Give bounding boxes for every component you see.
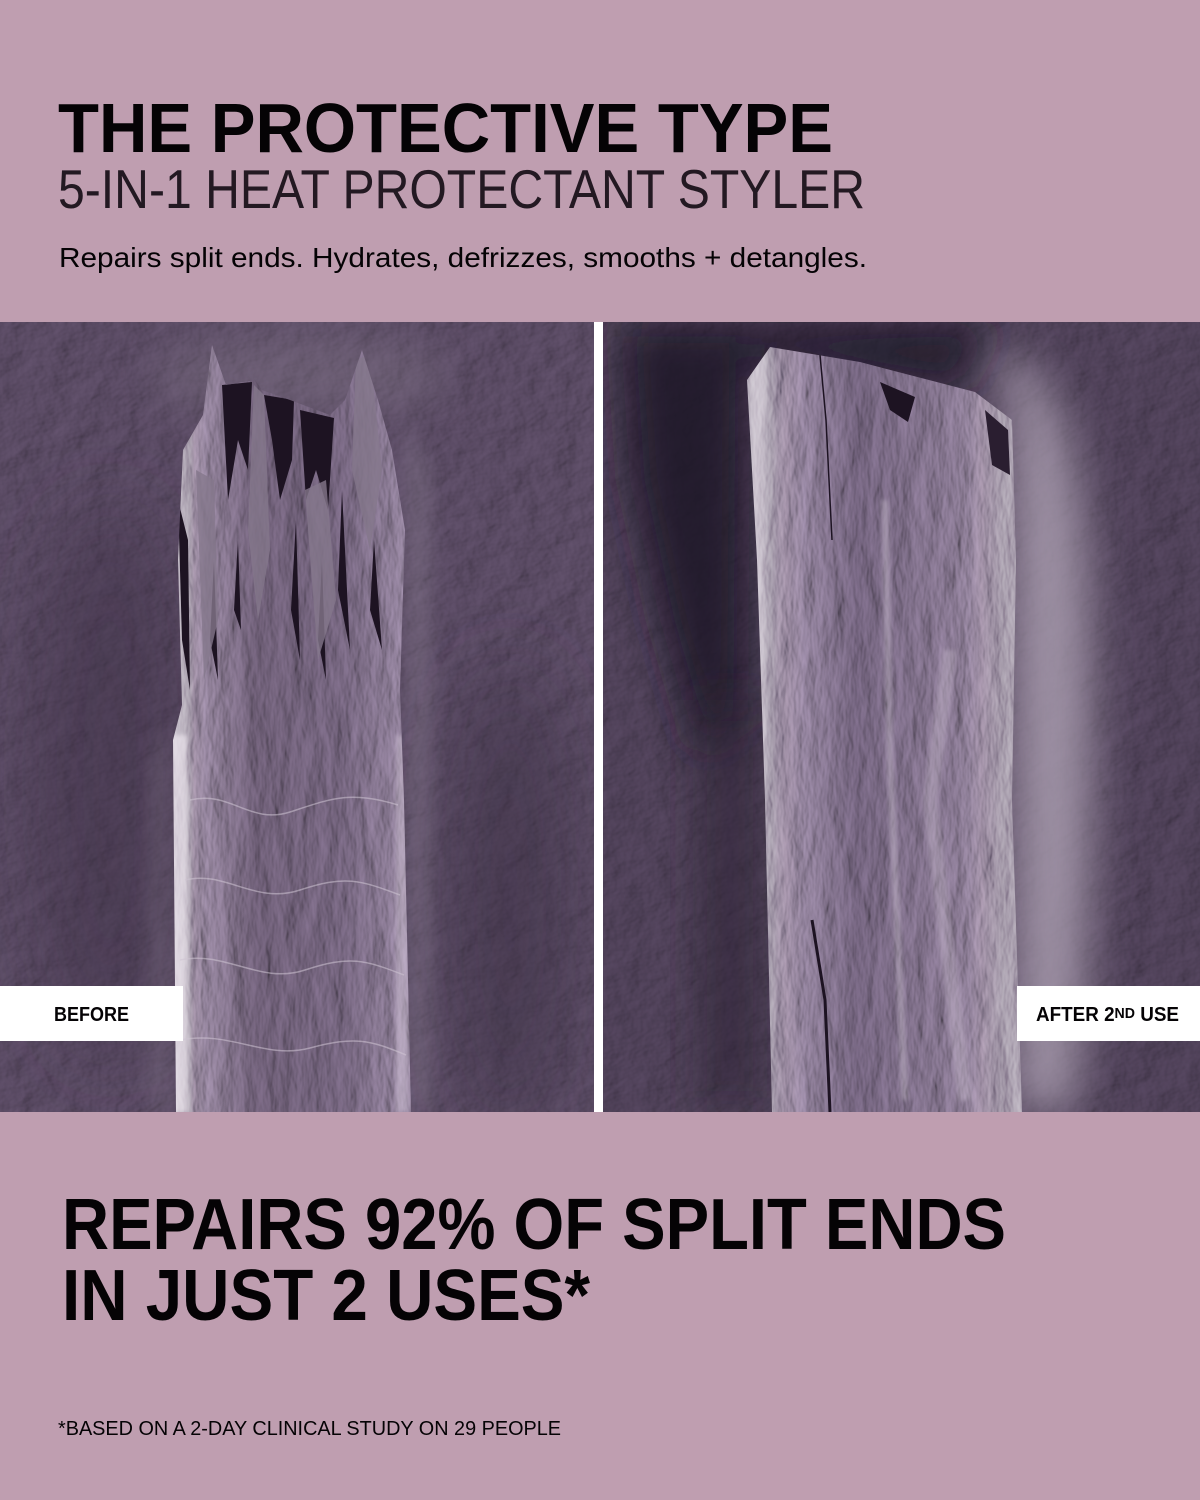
headline claim: IN JUST 2 USES* (62, 1256, 590, 1336)
label: after 2nd use: ND (1115, 1005, 1135, 1022)
headline claim (62, 1185, 1006, 1336)
label: before (0, 986, 183, 1041)
label: after 2nd use (1017, 986, 1200, 1041)
footnote: *BASED ON A 2-DAY CLINICAL STUDY ON 29 PEOPLE (58, 1418, 561, 1440)
label: after 2nd use: USE (1135, 1004, 1179, 1026)
hair shaft: split end (170, 340, 415, 1112)
tagline: Repairs split ends. Hydrates, defrizzes, smooths + detangles. (59, 242, 867, 273)
hair shaft: repaired (745, 345, 1025, 1112)
panel: after photo (603, 322, 1200, 1112)
subtitle: 5-IN-1 HEAT PROTECTANT STYLER (58, 158, 865, 220)
headline claim: REPAIRS 92% OF SPLIT ENDS (62, 1185, 1006, 1265)
panel: before photo (0, 322, 594, 1140)
label: before: BEFORE (54, 1004, 129, 1026)
label: after 2nd use: AFTER 2 (1036, 1004, 1119, 1026)
divider (594, 322, 603, 1112)
title: THE PROTECTIVE TYPE (58, 89, 833, 167)
